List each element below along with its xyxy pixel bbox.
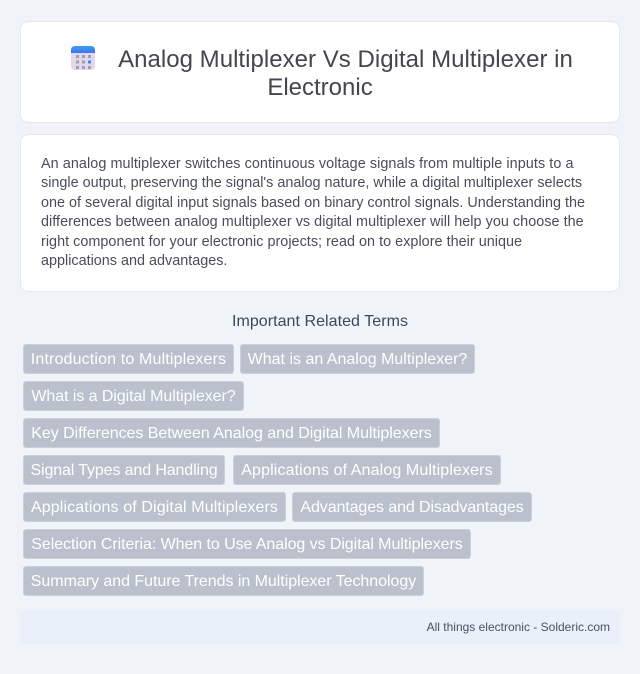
tag (292, 492, 532, 522)
title: Electronic (267, 74, 373, 101)
icon: calendar grid (71, 46, 95, 70)
description text: right component for your electronic projects; read on to explore their unique (41, 234, 522, 250)
tag: Key Differences Between Analog and Digital Multiplexers (31, 425, 432, 442)
tag: Advantages and Disadvantages (300, 499, 524, 516)
title (118, 46, 573, 101)
tag: What is an Analog Multiplexer? (248, 351, 467, 368)
footer text: All things electronic - Solderic.com (427, 620, 610, 634)
tag (23, 492, 286, 522)
tag: Signal Types and Handling (30, 462, 218, 479)
tag: Applications of Analog Multiplexers (241, 462, 493, 479)
description text: differences between analog multiplexer vs digital multiplexer will help you choose the (41, 214, 584, 230)
heading: related terms: Important Related Terms (232, 313, 408, 330)
tag (23, 381, 244, 411)
tag list (23, 344, 532, 596)
tag: Applications of Digital Multiplexers (31, 499, 278, 516)
footer (20, 610, 620, 644)
tag (23, 455, 225, 485)
tag (23, 418, 440, 448)
panel: header (20, 21, 620, 123)
description text: one of several digital input signals based on binary control signals. Understanding the (41, 195, 585, 211)
description text (41, 156, 585, 269)
description text: single output, preserving the signal's analog nature, while a digital multiplexer selects (41, 175, 582, 191)
panel: description (20, 134, 620, 292)
description text: applications and advantages. (41, 253, 227, 269)
description text: An analog multiplexer switches continuous voltage signals from multiple inputs to a (41, 156, 574, 172)
tag (23, 344, 234, 374)
tag (233, 455, 501, 485)
title: Analog Multiplexer Vs Digital Multiplexer in (118, 46, 573, 73)
tag (23, 566, 424, 596)
tag: Introduction to Multiplexers (31, 351, 226, 368)
tag: Selection Criteria: When to Use Analog vs Digital Multiplexers (31, 536, 463, 553)
tag: What is a Digital Multiplexer? (31, 388, 236, 405)
tag (23, 529, 471, 559)
tag: Summary and Future Trends in Multiplexer Technology (31, 573, 416, 590)
tag (240, 344, 475, 374)
